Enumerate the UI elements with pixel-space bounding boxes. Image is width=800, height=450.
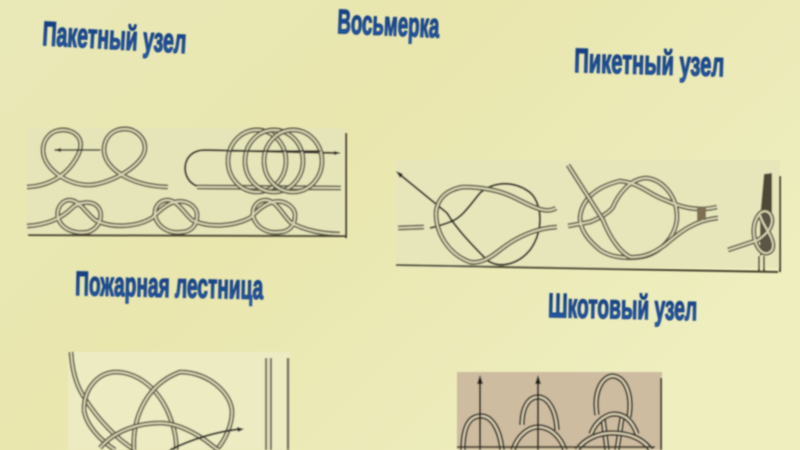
title: Пожарная лестница: Пожарная лестница	[75, 265, 264, 307]
panel: Шкотовый узел diagram	[457, 372, 662, 450]
icon: figure-eight threading step	[396, 171, 557, 265]
panel: Восьмерка diagrams	[396, 160, 780, 272]
panel: Пакетный узел diagrams	[27, 128, 346, 238]
icon: three coils step	[185, 130, 341, 192]
icon: side view post	[266, 358, 288, 450]
icon: sheet bend step one	[463, 375, 502, 450]
icon: tied figure-eight	[568, 165, 718, 258]
icon: fire ladder loops	[71, 352, 244, 450]
icon: sheet bend step three	[577, 376, 651, 450]
icon: sheet bend step two	[513, 375, 565, 450]
panel: Пожарная лестница diagram	[68, 352, 290, 450]
icon: open two-loop step	[27, 129, 168, 187]
icon: figure-eight on post	[728, 173, 773, 272]
title: Пакетный узел: Пакетный узел	[42, 15, 187, 61]
icon: finished knots on rope	[27, 200, 340, 234]
title: Восьмерка: Восьмерка	[337, 3, 441, 45]
